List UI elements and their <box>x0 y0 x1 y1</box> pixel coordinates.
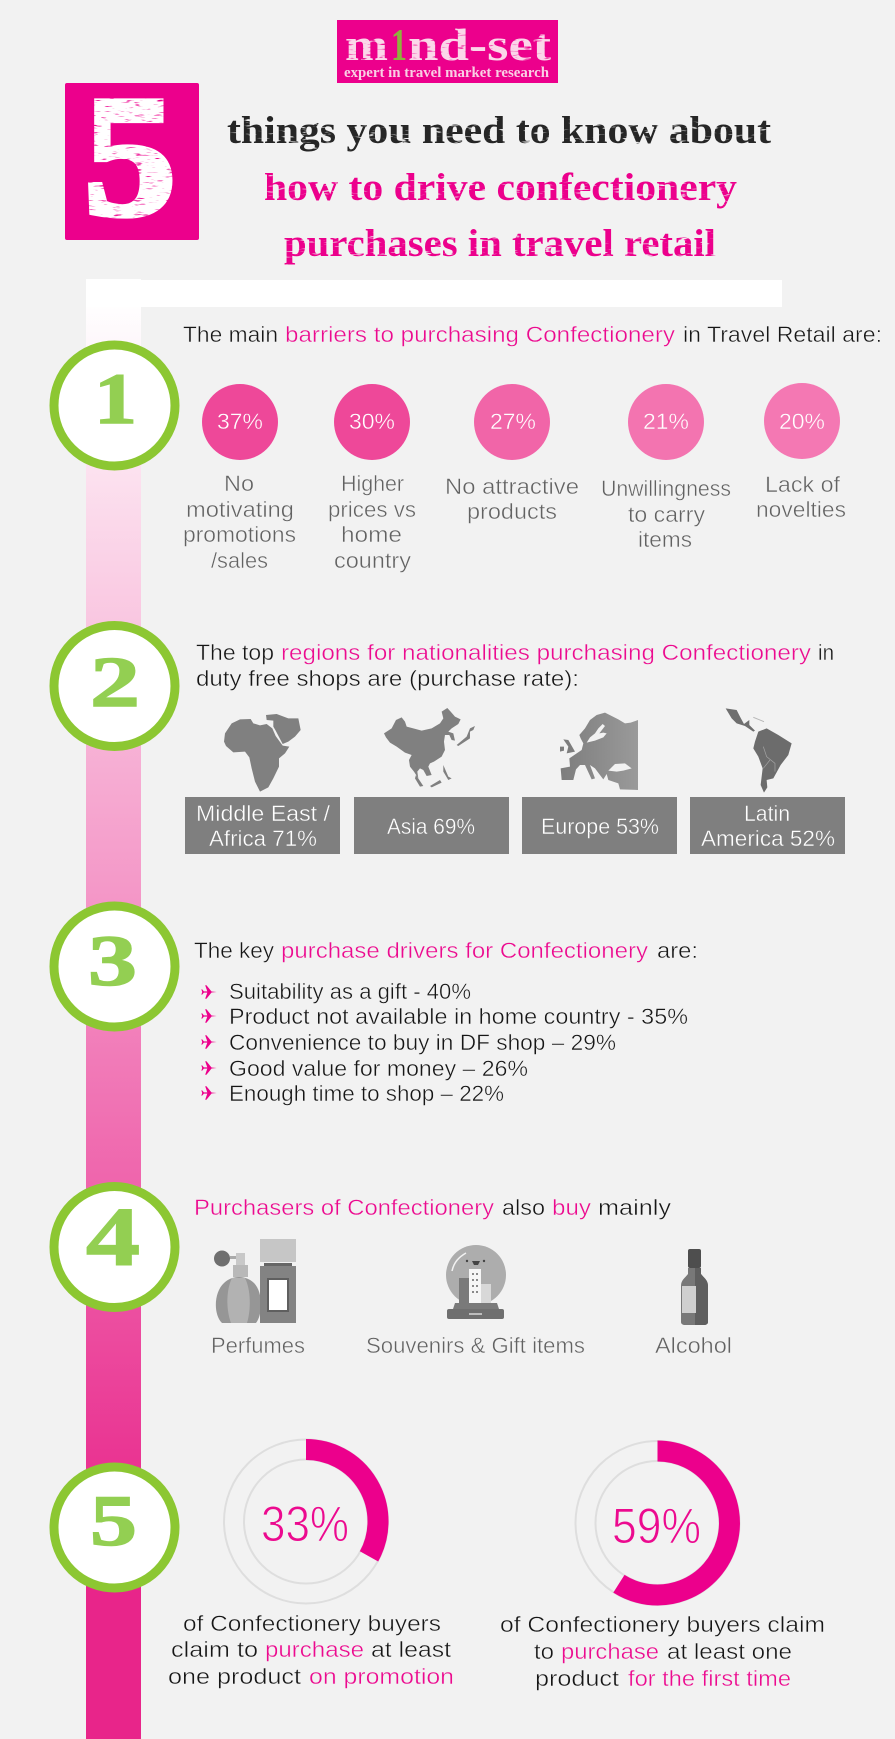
logo: 1 <box>391 19 407 70</box>
timeline bar <box>86 279 782 1739</box>
text: promotion buyers: of Confectionery buyers <box>183 1611 441 1636</box>
icon: snow globe <box>446 1245 506 1319</box>
logo: nd-set <box>408 19 552 70</box>
section 4 number: 4 <box>86 1191 140 1284</box>
section 1 number: 1 <box>94 359 137 439</box>
section 3 heading: purchase drivers for Confectionery <box>281 938 648 963</box>
section 4 heading: also <box>502 1195 545 1220</box>
barrier: 30%: prices vs <box>328 497 416 522</box>
barrier: 37%: No <box>224 471 254 496</box>
label: Middle East / Africa <box>185 797 340 854</box>
icon: perfume <box>214 1239 296 1323</box>
product labels: Souvenirs & Gift items <box>366 1333 585 1358</box>
map: Asia <box>384 708 475 787</box>
section 1 heading <box>183 322 882 347</box>
barrier: 20% <box>756 383 846 522</box>
text: first time buyers: purchase <box>561 1639 659 1664</box>
section 2 heading: duty free shops are (purchase rate): <box>196 666 579 691</box>
text: first time buyers: of Confectionery buyers claim <box>500 1612 825 1637</box>
section 2 heading: in <box>818 640 834 665</box>
drivers list: Good value for money – 26% <box>229 1056 528 1081</box>
barrier: 21%: Unwillingness <box>601 476 731 501</box>
barrier: 21% <box>601 384 731 552</box>
drivers list: Convenience to buy in DF shop – 29% <box>229 1030 616 1055</box>
barrier: 30%: 30% <box>349 409 395 434</box>
text: promotion buyers: claim to <box>171 1637 258 1662</box>
logo: m <box>345 19 388 70</box>
icon: alcohol bottle <box>681 1249 708 1325</box>
section 1 heading: in Travel Retail are: <box>683 322 882 347</box>
barrier: 37%: /sales <box>211 548 268 573</box>
barrier: 20%: novelties <box>756 497 846 522</box>
barrier: 20%: 20% <box>779 409 825 434</box>
label: Latin America <box>690 797 845 854</box>
section 1 heading: The main <box>183 322 278 347</box>
label: Asia: Asia 69% <box>387 814 475 839</box>
product labels: Perfumes <box>211 1333 305 1358</box>
product labels <box>211 1333 732 1358</box>
section 1 heading: barriers to purchasing Confectionery <box>285 322 675 347</box>
section 2 heading: The top <box>196 640 274 665</box>
text: first time buyers: at least one <box>667 1639 792 1664</box>
section 3 number <box>54 906 175 1027</box>
title <box>227 109 771 265</box>
label: Middle East / Africa: Middle East / <box>196 801 331 826</box>
product labels: Alcohol <box>655 1333 732 1358</box>
label: Latin America: America 52% <box>701 826 835 851</box>
section 3 heading: The key <box>194 938 274 963</box>
section 4 heading: mainly <box>598 1195 671 1220</box>
drivers list <box>201 979 688 1106</box>
barrier: 27%: products <box>467 499 557 524</box>
barrier: 21%: items <box>638 527 692 552</box>
section 5 number <box>54 1467 175 1588</box>
donut chart: 59% <box>576 1441 740 1605</box>
section 4 heading: Purchasers of Confectionery <box>194 1195 494 1220</box>
label: Middle East / Africa: Africa 71% <box>209 826 317 851</box>
donut chart: 59%: 59% <box>612 1498 701 1554</box>
logo <box>337 19 558 83</box>
section 4 heading <box>194 1195 671 1220</box>
big number 5 badge: 5 <box>84 62 176 252</box>
big number 5 badge <box>65 62 199 252</box>
text: promotion buyers <box>168 1611 454 1689</box>
barrier: 21%: 21% <box>643 409 689 434</box>
text: first time buyers <box>500 1612 825 1691</box>
barrier: 37%: promotions <box>183 522 296 547</box>
drivers list: Suitability as a gift - 40% <box>229 979 471 1004</box>
section 3 heading <box>194 938 698 963</box>
label: Asia <box>354 797 509 854</box>
barrier: 30%: country <box>334 548 411 573</box>
logo: expert in travel market research <box>344 65 550 81</box>
barrier: 30% <box>328 384 416 573</box>
barrier: 30%: Higher <box>341 471 404 496</box>
map: Middle East and Africa <box>224 714 301 792</box>
barrier: 37% <box>183 384 296 573</box>
text: promotion buyers: one product <box>168 1664 301 1689</box>
barrier: 27% <box>445 384 579 524</box>
section 2 heading: regions for nationalities purchasing Confectionery <box>281 640 811 665</box>
barrier: 20%: Lack of <box>765 472 841 497</box>
label: Europe: Europe 53% <box>541 814 659 839</box>
donut chart: 33%: 33% <box>261 1496 349 1552</box>
section 2 number: 2 <box>90 642 140 722</box>
title: how to drive confectionery <box>264 166 738 209</box>
section 3 number: 3 <box>88 921 137 1001</box>
map: Europe <box>560 713 638 790</box>
section 4 heading: buy <box>552 1195 591 1220</box>
text: promotion buyers: at least <box>371 1637 451 1662</box>
barrier: 37%: 37% <box>217 409 263 434</box>
section 1 number <box>54 345 175 466</box>
text: promotion buyers: on promotion <box>309 1664 454 1689</box>
section 4 number <box>54 1186 175 1308</box>
label: Europe <box>522 797 677 854</box>
text: first time buyers: for the first time <box>628 1666 791 1691</box>
label: Latin America: Latin <box>744 801 790 826</box>
barrier: 27%: No attractive <box>445 474 579 499</box>
section 2 heading <box>196 640 834 691</box>
title: things you need to know about <box>227 109 771 152</box>
barrier: 21%: to carry <box>628 502 705 527</box>
barrier: 27%: 27% <box>490 409 536 434</box>
text: first time buyers: product <box>535 1666 619 1691</box>
drivers list: Enough time to shop – 22% <box>229 1081 504 1106</box>
drivers list: Product not available in home country - 35% <box>229 1004 688 1029</box>
text: promotion buyers: purchase <box>265 1637 364 1662</box>
title: purchases in travel retail <box>284 222 716 265</box>
barrier: 30%: home <box>341 522 402 547</box>
donut chart: 33% <box>224 1440 388 1604</box>
barrier: 37%: motivating <box>186 497 294 522</box>
section 2 number <box>54 626 175 746</box>
section 5 number: 5 <box>90 1481 137 1561</box>
section 3 heading: are: <box>657 938 698 963</box>
map: Latin America <box>726 708 792 793</box>
text: first time buyers: to <box>534 1639 554 1664</box>
